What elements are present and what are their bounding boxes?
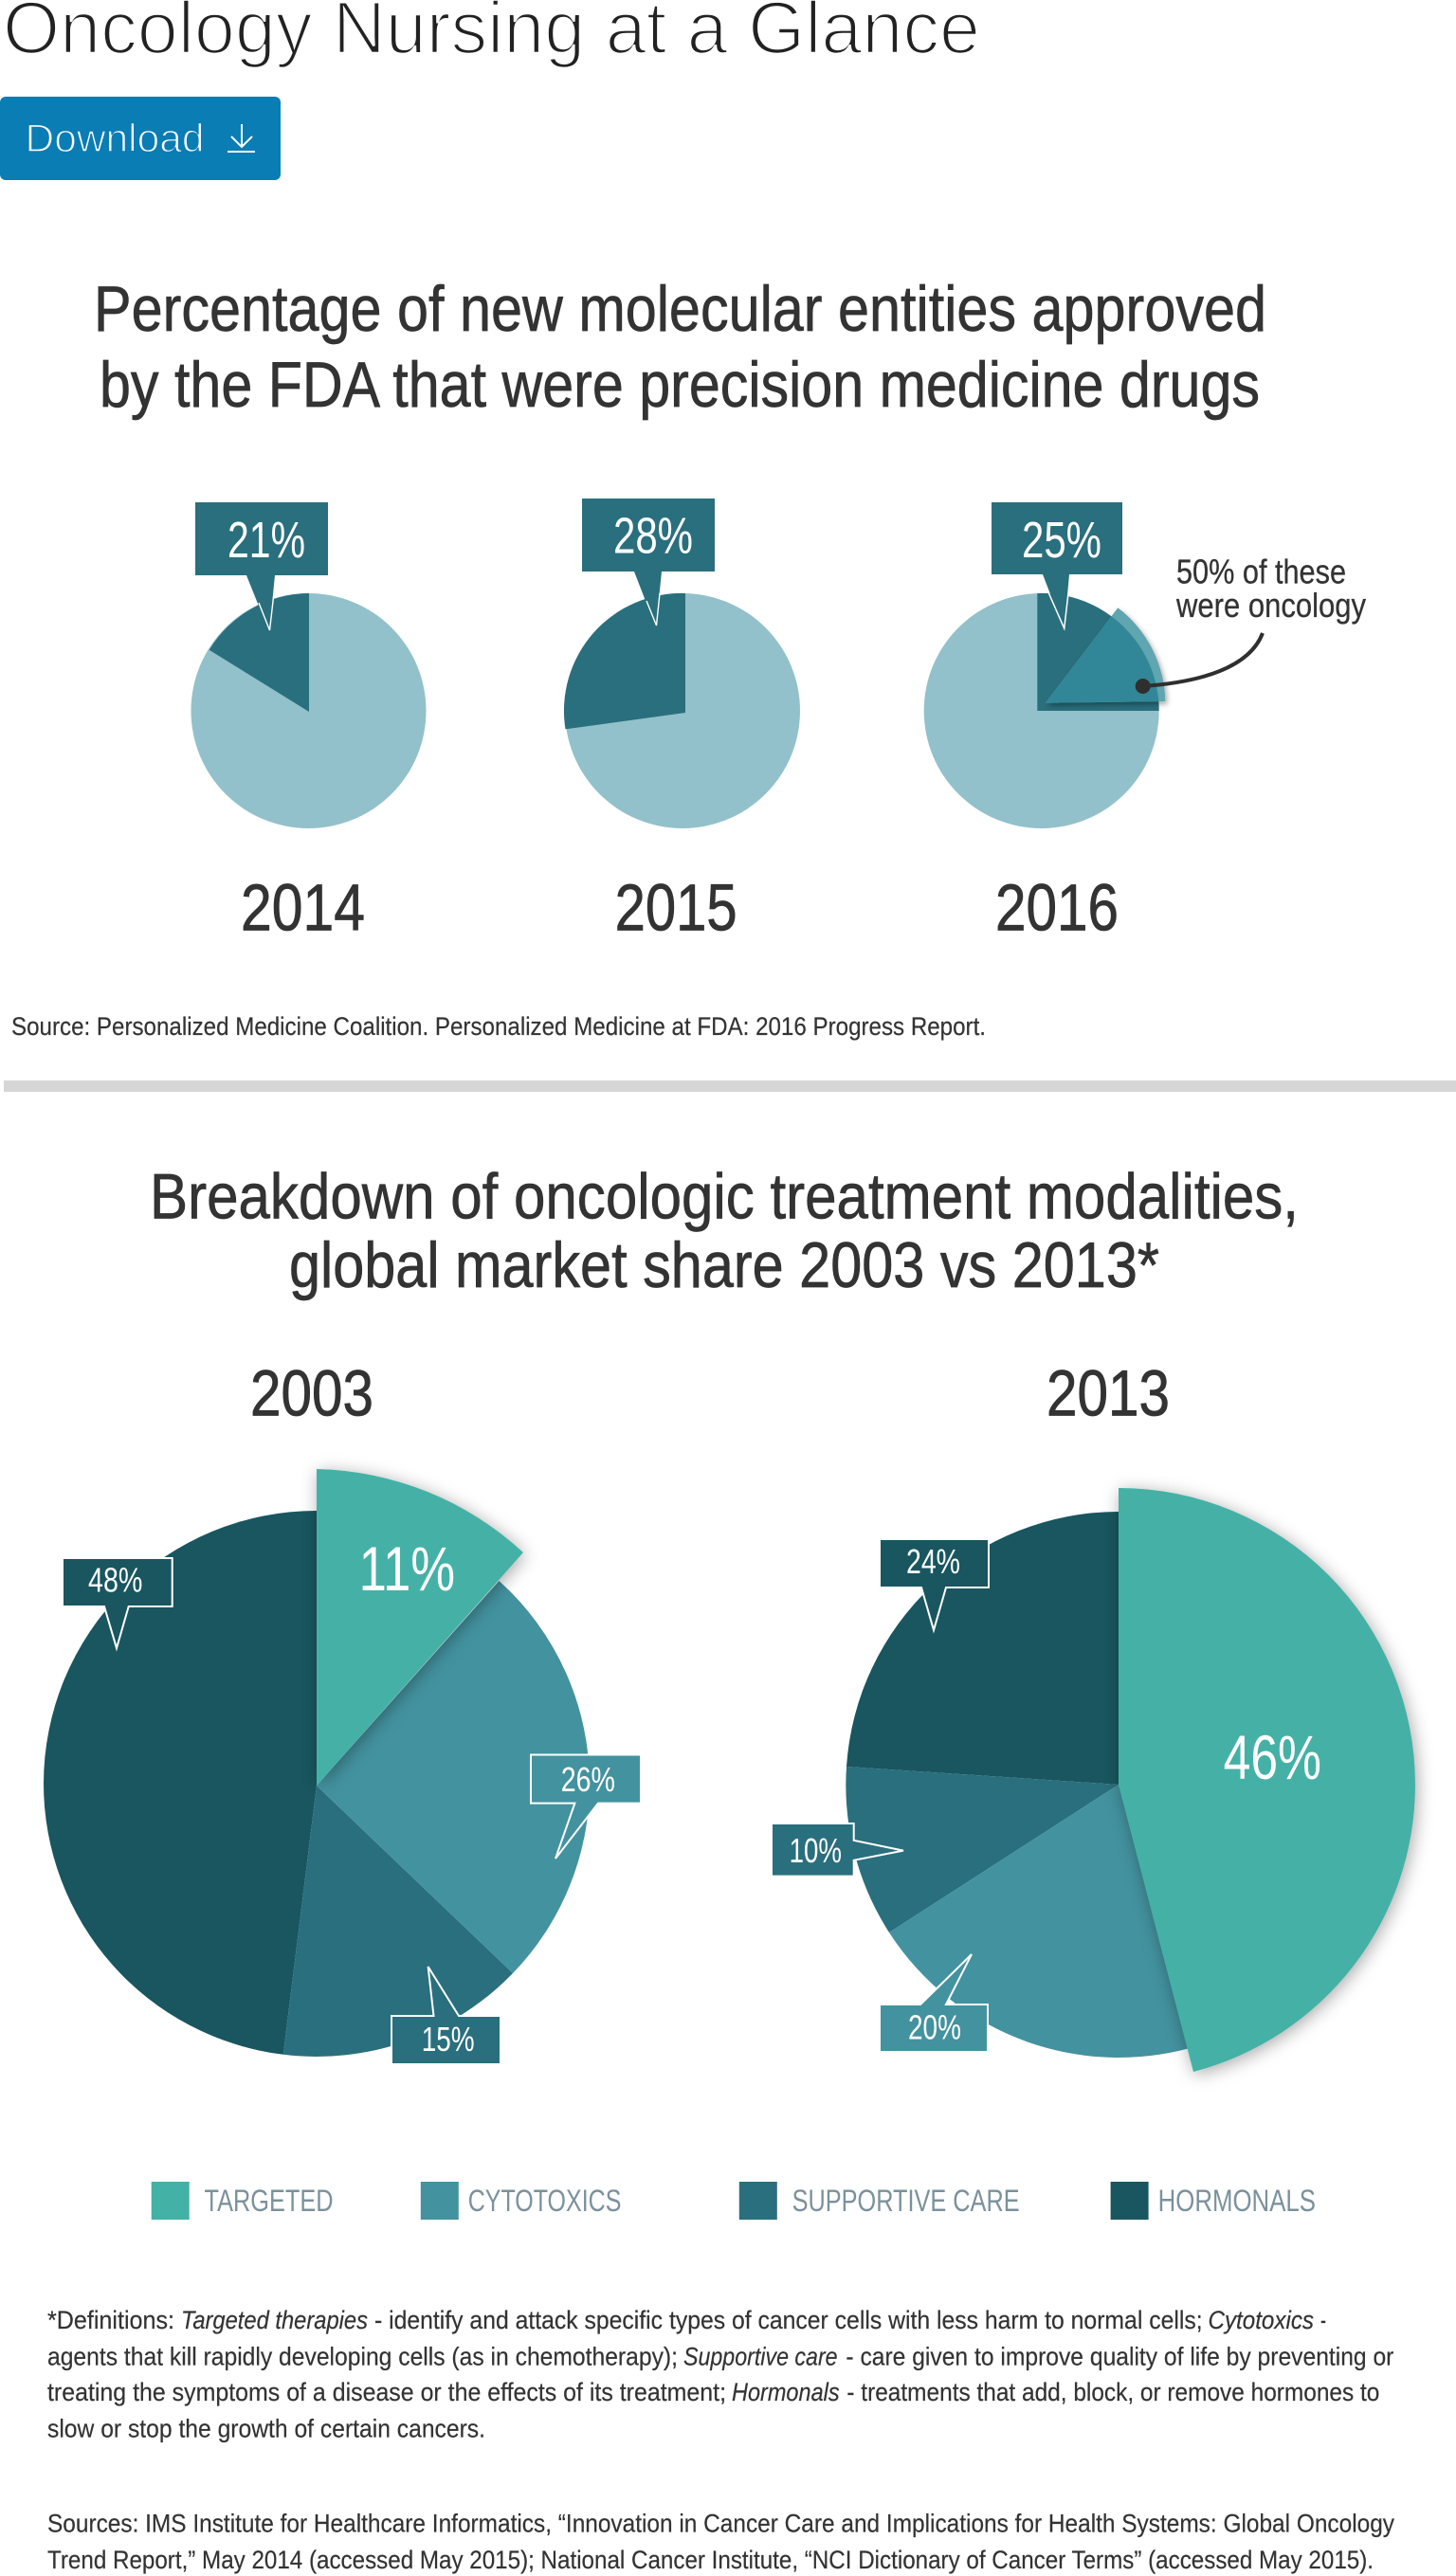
source note: Source: Personalized Medicine Coalition. Personalized Medicine at FDA: 2016 Progress Report. — [11, 1012, 986, 1041]
icon: download arrow — [228, 124, 255, 152]
definitions text: Hormonals — [732, 2378, 840, 2406]
download button — [0, 97, 281, 180]
callout: 15%: 15% — [422, 2020, 475, 2059]
definitions text: - treatments that add, block, or remove hormones to — [846, 2378, 1379, 2406]
pie chart: 2014 — [191, 502, 427, 828]
callout: 20%: 20% — [908, 2007, 961, 2047]
callout: 28% — [582, 499, 715, 627]
annotation: 50% oncology: 50% of these — [1176, 552, 1346, 591]
pie chart: 2015 — [564, 499, 800, 828]
year labels: 2014 — [241, 871, 365, 945]
value: 46%: 46% — [1224, 1722, 1321, 1792]
oncology highlight wedge — [1046, 608, 1165, 703]
annotation: 50% oncology: were oncology — [1175, 586, 1366, 625]
heading: treatment modalities: Breakdown of oncologic treatment modalities, — [150, 1161, 1299, 1233]
callout: 25% — [992, 502, 1122, 630]
definitions text: Supportive care — [683, 2343, 838, 2371]
legend item: targeted — [152, 2182, 334, 2220]
heading: treatment modalities — [150, 1161, 1299, 1301]
callout: 21% — [195, 502, 328, 632]
heading: treatment modalities: global market share 2003 vs 2013* — [289, 1229, 1159, 1301]
heading: precision medicine share: by the FDA that were precision medicine drugs — [100, 349, 1260, 421]
callout: 10%: 10% — [790, 1831, 842, 1870]
callout: 48%: 48% — [88, 1561, 142, 1600]
definitions text — [47, 2306, 1393, 2443]
definitions text: slow or stop the growth of certain cancers. — [47, 2415, 485, 2443]
legend item: supportive care — [739, 2182, 1020, 2220]
year label: 2003: 2003 — [250, 1356, 373, 1429]
pie chart: 2013 — [772, 1488, 1415, 2072]
definitions text: - identify and attack specific types of cancer cells with less harm to normal cells; — [374, 2306, 1203, 2334]
year labels — [241, 871, 1119, 945]
definitions text: agents that kill rapidly developing cells (as in chemotherapy); — [47, 2343, 678, 2371]
definitions text: Cytotoxics — [1208, 2306, 1314, 2334]
heading: precision medicine share — [94, 273, 1266, 421]
download button: Download — [25, 116, 205, 160]
year labels: 2015 — [615, 871, 737, 945]
arrow: leader line — [1143, 633, 1263, 686]
callout: 15% — [391, 1967, 500, 2064]
callout: 26%: 26% — [561, 1760, 615, 1799]
definitions text: Targeted therapies — [181, 2306, 368, 2334]
heading: precision medicine share: Percentage of new molecular entities approved — [94, 273, 1266, 345]
callout: 24%: 24% — [906, 1542, 960, 1581]
legend item: supportive care: SUPPORTIVE CARE — [792, 2184, 1020, 2218]
callout: 24% — [880, 1539, 989, 1630]
legend item: targeted: TARGETED — [205, 2184, 334, 2218]
definitions text: treating the symptoms of a disease or the effects of its treatment; — [47, 2378, 726, 2406]
year label: 2013: 2013 — [1046, 1356, 1170, 1429]
callout: 26% — [531, 1755, 641, 1859]
definitions text: - care given to improve quality of life by preventing or — [846, 2343, 1393, 2371]
legend item: cytotoxics: CYTOTOXICS — [468, 2184, 621, 2218]
pie chart: 2016 — [924, 502, 1165, 828]
callout: 28%: 28% — [613, 508, 693, 565]
value: 11%: 11% — [359, 1533, 455, 1604]
sources text — [47, 2510, 1394, 2574]
callout: 25%: 25% — [1022, 512, 1101, 569]
callout: 21%: 21% — [228, 512, 305, 569]
definitions text: - — [1320, 2306, 1326, 2334]
callout: 20% — [880, 1954, 988, 2052]
callout: 10% — [772, 1823, 903, 1877]
legend item: cytotoxics — [421, 2182, 621, 2220]
callout: 48% — [63, 1558, 173, 1648]
legend — [152, 2182, 1316, 2220]
definitions text: *Definitions: — [47, 2306, 174, 2334]
annotation: 50% oncology — [1136, 552, 1366, 694]
legend item: hormonals: HORMONALS — [1158, 2184, 1316, 2218]
legend item: hormonals — [1111, 2182, 1316, 2220]
pie chart: 2003 — [44, 1469, 641, 2064]
year labels: 2016 — [995, 871, 1119, 945]
